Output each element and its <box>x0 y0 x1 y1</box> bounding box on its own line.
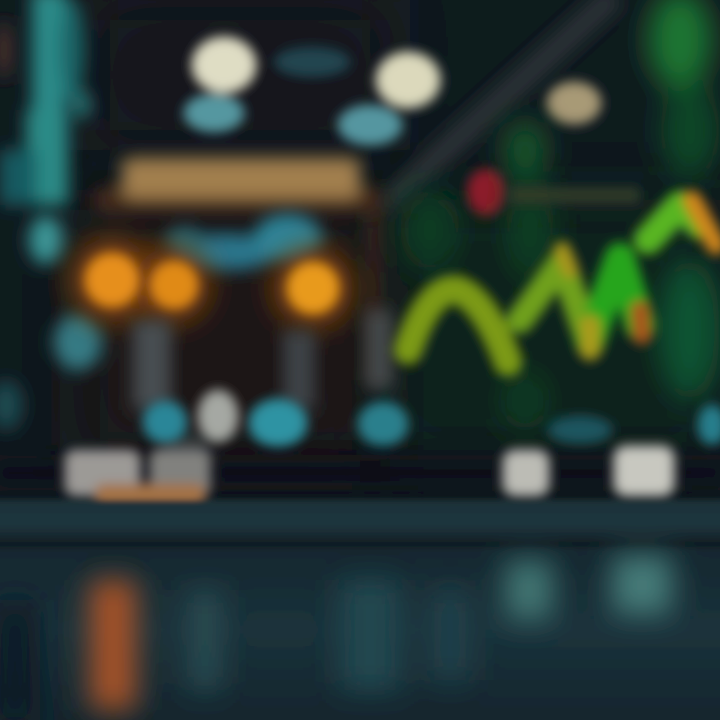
blue blob <box>165 214 322 270</box>
green zig-zag chart line <box>408 200 716 362</box>
shelf band <box>0 500 720 547</box>
dark base row <box>0 455 720 491</box>
top lights and labels <box>184 37 601 145</box>
diagonal beam <box>375 0 615 380</box>
left teal structure <box>0 0 102 429</box>
floor reflection <box>0 547 720 720</box>
white tiles on base <box>65 446 674 506</box>
tan heading bar <box>95 158 380 212</box>
green foliage <box>400 0 720 430</box>
horizontal line right <box>510 187 640 203</box>
teal and white tiles <box>143 390 720 447</box>
orange lights <box>70 238 353 328</box>
red marker <box>467 169 507 215</box>
grey columns <box>133 310 392 490</box>
